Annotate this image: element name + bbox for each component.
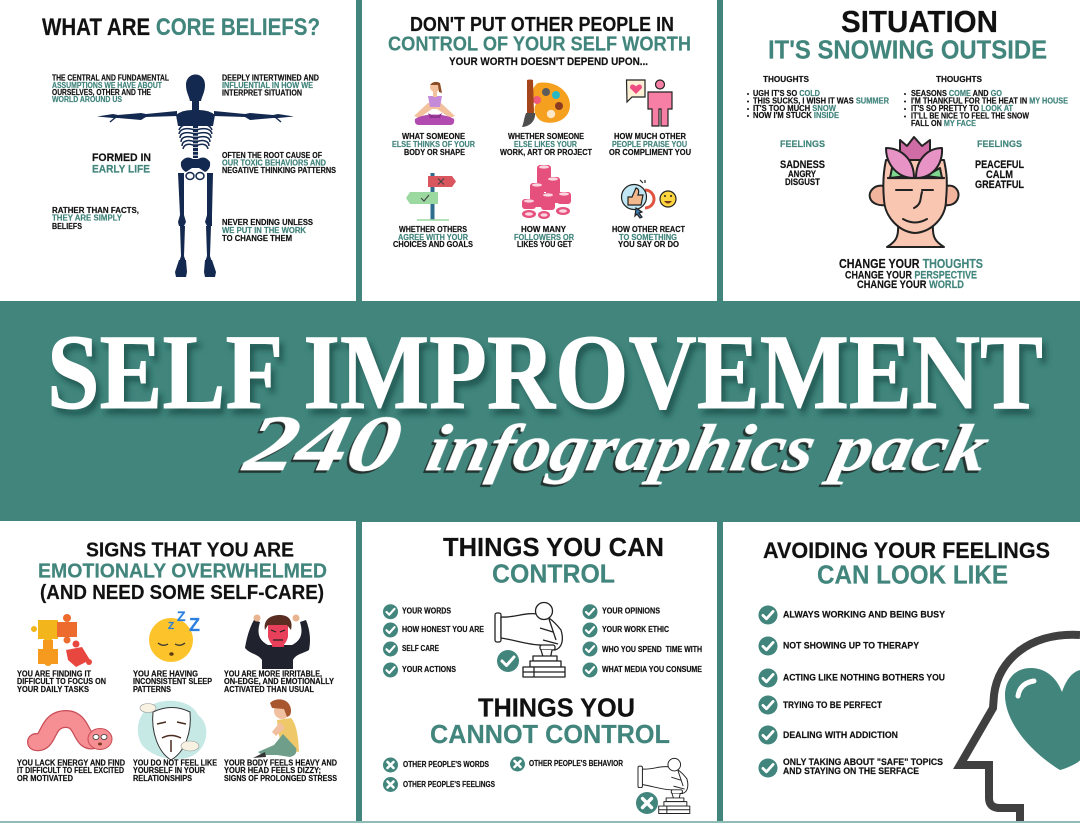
list: controllable left bbox=[383, 604, 485, 678]
icon: sleeping face: Z bbox=[177, 608, 186, 624]
bottom edge line bbox=[0, 821, 1080, 823]
caption: focus: YOUR DAILY TASKS bbox=[17, 685, 90, 694]
caption: followers: HOW MANY bbox=[521, 225, 567, 234]
banner subtitle: 240 bbox=[237, 400, 409, 488]
caption: react bbox=[612, 225, 685, 249]
caption: focus: DIFFICULT TO FOCUS ON bbox=[17, 677, 106, 686]
caption: praise bbox=[609, 132, 691, 157]
heading: self worth: YOUR WORTH DOESN'T DEPEND UPON... bbox=[449, 56, 648, 68]
text block: root cause: NEGATIVE THINKING PATTERNS bbox=[222, 166, 337, 175]
feelings: negative: ANGRY bbox=[788, 169, 816, 179]
text block: rather than facts: BELIEFS bbox=[52, 222, 83, 231]
list: controllable right bbox=[582, 604, 703, 678]
caption: stress: YOUR BODY FEELS HEAVY AND bbox=[224, 759, 337, 768]
caption: work art project bbox=[500, 132, 592, 157]
heading: overwhelmed bbox=[38, 539, 327, 604]
icon: paint palette bbox=[522, 80, 570, 127]
list: controllable left: SELF CARE bbox=[402, 644, 440, 653]
list: not controllable: OTHER PEOPLE'S BEHAVIOR bbox=[529, 759, 623, 768]
caption: focus: YOU ARE FINDING IT bbox=[17, 670, 91, 679]
panel: avoiding your feelings bbox=[723, 522, 1080, 823]
icon: like reaction bbox=[622, 180, 676, 218]
list: positive thoughts: IT'S SO PRETTY TO LOOK AT bbox=[911, 104, 1013, 113]
caption: sleep: PATTERNS bbox=[133, 685, 172, 694]
text block: change your: CHANGE YOUR PERSPECTIVE bbox=[845, 270, 977, 282]
feelings: positive: CALM bbox=[986, 169, 1013, 181]
text block: never ending: WE PUT IN THE WORK bbox=[222, 226, 306, 235]
label: thoughts right: THOUGHTS bbox=[936, 75, 983, 84]
panel: things you can control bbox=[362, 522, 717, 821]
text block: root cause bbox=[222, 151, 337, 175]
list: negative thoughts: NOW I'M STUCK INSIDE bbox=[753, 111, 840, 120]
list: controllable left: YOUR ACTIONS bbox=[402, 665, 457, 674]
caption: irritable: ON-EDGE, AND EMOTIONALLY bbox=[224, 677, 335, 686]
text block: deeply intertwined: DEEPLY INTERTWINED AND bbox=[222, 74, 319, 82]
text block: rather than facts: THEY ARE SIMPLY bbox=[52, 214, 123, 222]
caption: sleep: YOU ARE HAVING bbox=[133, 670, 198, 679]
caption: react: HOW OTHER REACT bbox=[612, 225, 685, 234]
list: avoidance behaviours: ALWAYS WORKING AND BEING BUSY bbox=[783, 610, 945, 620]
text block: deeply intertwined: INFLUENTIAL IN HOW WE bbox=[222, 81, 314, 90]
heading: overwhelmed: EMOTIONALY OVERWHELMED bbox=[38, 560, 327, 583]
banner: self improvement bbox=[0, 301, 1080, 521]
caption: work art project: WORK, ART OR PROJECT bbox=[500, 148, 592, 157]
heading: overwhelmed: (AND NEED SOME SELF-CARE) bbox=[40, 581, 324, 604]
feelings: negative: DISGUST bbox=[785, 177, 820, 187]
list: controllable right: YOUR OPINIONS bbox=[602, 607, 661, 616]
icon: angry man bbox=[245, 614, 310, 669]
text block: never ending bbox=[222, 218, 314, 243]
caption: work art project: WHETHER SOMEONE bbox=[508, 132, 585, 141]
list: negative thoughts: UGH IT'S SO COLD bbox=[753, 89, 820, 98]
caption: choices and goals: AGREE WITH YOUR bbox=[398, 233, 468, 242]
caption: irritable bbox=[224, 670, 335, 694]
icon: person with heart bubble bbox=[626, 80, 672, 126]
panel: situation bbox=[723, 0, 1080, 301]
feelings: positive bbox=[975, 139, 1024, 191]
list: controllable left: YOUR WORDS bbox=[402, 607, 452, 616]
icon: puzzle pieces bbox=[31, 614, 92, 667]
panel: emotionally overwhelmed bbox=[0, 521, 356, 821]
text block: central assumptions: WORLD AROUND US bbox=[52, 95, 123, 104]
feelings: negative: SADNESS bbox=[780, 159, 825, 171]
text block: central assumptions bbox=[52, 74, 169, 104]
text block: central assumptions: OURSELVES, OTHER AND THE bbox=[52, 88, 152, 97]
list: avoidance behaviours: AND STAYING ON THE SERFACE bbox=[783, 766, 919, 776]
icon: skeleton bbox=[97, 74, 294, 277]
caption: energy: OR MOTIVATED bbox=[17, 774, 73, 783]
caption: praise: OR COMPLIMENT YOU bbox=[609, 148, 691, 157]
caption: focus bbox=[17, 670, 106, 694]
caption: body or shape bbox=[392, 132, 475, 157]
heading: situation: SITUATION bbox=[841, 4, 998, 39]
caption: stress bbox=[224, 759, 338, 783]
list: positive thoughts: FALL ON MY FACE bbox=[911, 119, 977, 128]
caption: followers: FOLLOWERS OR bbox=[514, 233, 574, 242]
list: controllable right: WHO YOU SPEND TIME WITH bbox=[602, 645, 702, 654]
panel: what are core beliefs bbox=[0, 0, 356, 301]
list: negative thoughts bbox=[747, 89, 889, 120]
text block: never ending: NEVER ENDING UNLESS bbox=[222, 218, 314, 227]
feelings: positive: PEACEFUL bbox=[975, 159, 1024, 171]
caption: followers: LIKES YOU GET bbox=[517, 240, 572, 249]
list: not controllable: OTHER PEOPLE'S FEELINGS bbox=[403, 780, 496, 789]
banner subtitle: infographics bbox=[421, 413, 822, 485]
text block: change your: CHANGE YOUR THOUGHTS bbox=[839, 257, 983, 271]
text block: central assumptions: ASSUMPTIONS WE HAVE ABOUT bbox=[52, 81, 162, 90]
icon: coin stacks bbox=[522, 165, 571, 219]
caption: choices and goals: CHOICES AND GOALS bbox=[393, 240, 474, 249]
caption: energy bbox=[17, 759, 125, 783]
list: avoidance behaviours: ONLY TAKING ABOUT "SAFE" TOPICS bbox=[783, 757, 943, 767]
list: avoidance behaviours: NOT SHOWING UP TO THERAPY bbox=[783, 641, 919, 651]
caption: praise: PEOPLE PRAISE YOU bbox=[612, 140, 687, 149]
caption: irritable: YOU ARE MORE IRRITABLE, bbox=[224, 670, 322, 679]
icon: sleeping face: Z bbox=[189, 615, 200, 635]
icon: sleeping face: Z bbox=[168, 621, 174, 632]
heading: self worth: DON'T PUT OTHER PEOPLE IN bbox=[410, 13, 674, 36]
icon: hand on chess piece with cross bbox=[636, 758, 690, 814]
caption: relationships: RELATIONSHIPS bbox=[133, 774, 193, 783]
feelings: positive: GREATFUL bbox=[975, 179, 1024, 191]
caption: body or shape: BODY OR SHAPE bbox=[404, 148, 466, 157]
text block: root cause: OFTEN THE ROOT CAUSE OF bbox=[222, 151, 322, 160]
text block: never ending: TO CHANGE THEM bbox=[222, 234, 292, 243]
heading: situation bbox=[768, 4, 1047, 65]
list: not controllable bbox=[383, 756, 623, 792]
caption: stress: YOUR HEAD FEELS DIZZY; bbox=[224, 766, 321, 775]
heading: cannot control bbox=[430, 693, 670, 749]
caption: energy: IT DIFFICULT TO FEEL EXCITED bbox=[17, 766, 124, 775]
text block: root cause: OUR TOXIC BEHAVIORS AND bbox=[222, 158, 326, 168]
heading: core beliefs: WHAT ARE CORE BELIEFS? bbox=[42, 14, 320, 41]
panel: self worth bbox=[362, 0, 717, 301]
icon: signpost bbox=[406, 173, 456, 220]
icon: head with heart bbox=[960, 635, 1080, 823]
heading: avoiding: AVOIDING YOUR FEELINGS bbox=[763, 538, 1050, 563]
heading: self worth bbox=[388, 13, 691, 68]
caption: work art project: ELSE LIKES YOUR bbox=[514, 140, 577, 149]
list: positive thoughts: IT'LL BE NICE TO FEEL THE SNOW bbox=[911, 112, 1029, 120]
list: avoidance behaviours: DEALING WITH ADDICTION bbox=[783, 730, 898, 740]
text block: formed in early life: EARLY LIFE bbox=[92, 164, 150, 176]
heading: can control: CONTROL bbox=[492, 559, 615, 589]
caption: irritable: ACTIVATED THAN USUAL bbox=[224, 685, 314, 694]
icon: sleeping face bbox=[149, 608, 200, 662]
list: not controllable: OTHER PEOPLE'S WORDS bbox=[403, 760, 490, 769]
feelings: negative bbox=[780, 139, 825, 187]
list: controllable right: YOUR WORK ETHIC bbox=[602, 625, 669, 634]
heading: situation: IT'S SNOWING OUTSIDE bbox=[768, 35, 1047, 65]
heading: can control: THINGS YOU CAN bbox=[443, 532, 664, 562]
list: avoidance behaviours bbox=[758, 605, 945, 778]
banner subtitle: pack bbox=[821, 413, 995, 485]
icon: anonymous mask bbox=[138, 701, 206, 760]
caption: relationships: YOU DO NOT FEEL LIKE bbox=[133, 759, 218, 768]
icon: sitting person bbox=[253, 699, 299, 758]
text block: deeply intertwined: INTERPRET SITUATION bbox=[222, 88, 302, 98]
banner subtitle bbox=[237, 400, 998, 488]
caption: react: YOU SAY OR DO bbox=[618, 240, 679, 249]
feelings: positive: FEELINGS bbox=[977, 139, 1022, 149]
caption: praise: HOW MUCH OTHER bbox=[614, 132, 686, 141]
list: positive thoughts: SEASONS COME AND GO bbox=[911, 89, 1002, 98]
heading: overwhelmed: SIGNS THAT YOU ARE bbox=[86, 539, 294, 562]
text block: change your bbox=[839, 257, 983, 291]
icon: hand on chess piece with check bbox=[495, 602, 565, 677]
caption: followers bbox=[514, 225, 574, 249]
caption: choices and goals bbox=[393, 225, 474, 249]
list: controllable right: WHAT MEDIA YOU CONSUME bbox=[602, 665, 703, 674]
list: positive thoughts: I'M THANKFUL FOR THE HEAT IN MY HOUSE bbox=[911, 96, 1069, 106]
feelings: negative: FEELINGS bbox=[780, 139, 825, 149]
heading: cannot control: CANNOT CONTROL bbox=[430, 719, 670, 749]
text block: central assumptions: THE CENTRAL AND FUNDAMENTAL bbox=[52, 74, 169, 83]
text block: rather than facts: RATHER THAN FACTS, bbox=[52, 206, 139, 215]
list: positive thoughts bbox=[904, 89, 1069, 128]
icon: head with lotus bbox=[870, 137, 958, 247]
caption: body or shape: WHAT SOMEONE bbox=[402, 132, 466, 141]
heading: avoiding: CAN LOOK LIKE bbox=[817, 559, 1008, 589]
caption: react: TO SOMETHING bbox=[619, 233, 677, 242]
heading: self worth: CONTROL OF YOUR SELF WORTH bbox=[388, 32, 691, 56]
heading: can control bbox=[443, 532, 664, 589]
heading: avoiding bbox=[763, 538, 1050, 589]
caption: sleep bbox=[133, 670, 213, 694]
label: thoughts left: THOUGHTS bbox=[763, 75, 810, 84]
caption: body or shape: ELSE THINKS OF YOUR bbox=[392, 140, 475, 149]
text block: rather than facts bbox=[52, 206, 139, 231]
heading: cannot control: THINGS YOU bbox=[478, 693, 635, 723]
caption: sleep: INCONSISTENT SLEEP bbox=[133, 677, 213, 686]
list: controllable left: HOW HONEST YOU ARE bbox=[402, 625, 485, 634]
caption: relationships: YOURSELF IN YOUR bbox=[133, 766, 205, 775]
caption: stress: SIGNS OF PROLONGED STRESS bbox=[224, 774, 338, 783]
icon: yoga woman bbox=[414, 82, 455, 125]
text block: formed in early life: FORMED IN bbox=[92, 152, 151, 164]
text block: deeply intertwined bbox=[222, 74, 319, 98]
caption: energy: YOU LACK ENERGY AND FIND bbox=[17, 759, 125, 768]
list: avoidance behaviours: TRYING TO BE PERFECT bbox=[783, 700, 882, 710]
list: negative thoughts: THIS SUCKS, I WISH IT WAS SUMMER bbox=[753, 96, 889, 106]
text block: formed in early life bbox=[92, 152, 151, 176]
caption: choices and goals: WHETHER OTHERS bbox=[399, 225, 468, 234]
list: negative thoughts: IT'S TOO MUCH SNOW bbox=[753, 104, 836, 113]
list: avoidance behaviours: ACTING LIKE NOTHING BOTHERS YOU bbox=[783, 673, 945, 683]
caption: relationships bbox=[133, 759, 218, 783]
icon: tired worm bbox=[36, 719, 112, 750]
text block: change your: CHANGE YOUR WORLD bbox=[857, 279, 964, 291]
